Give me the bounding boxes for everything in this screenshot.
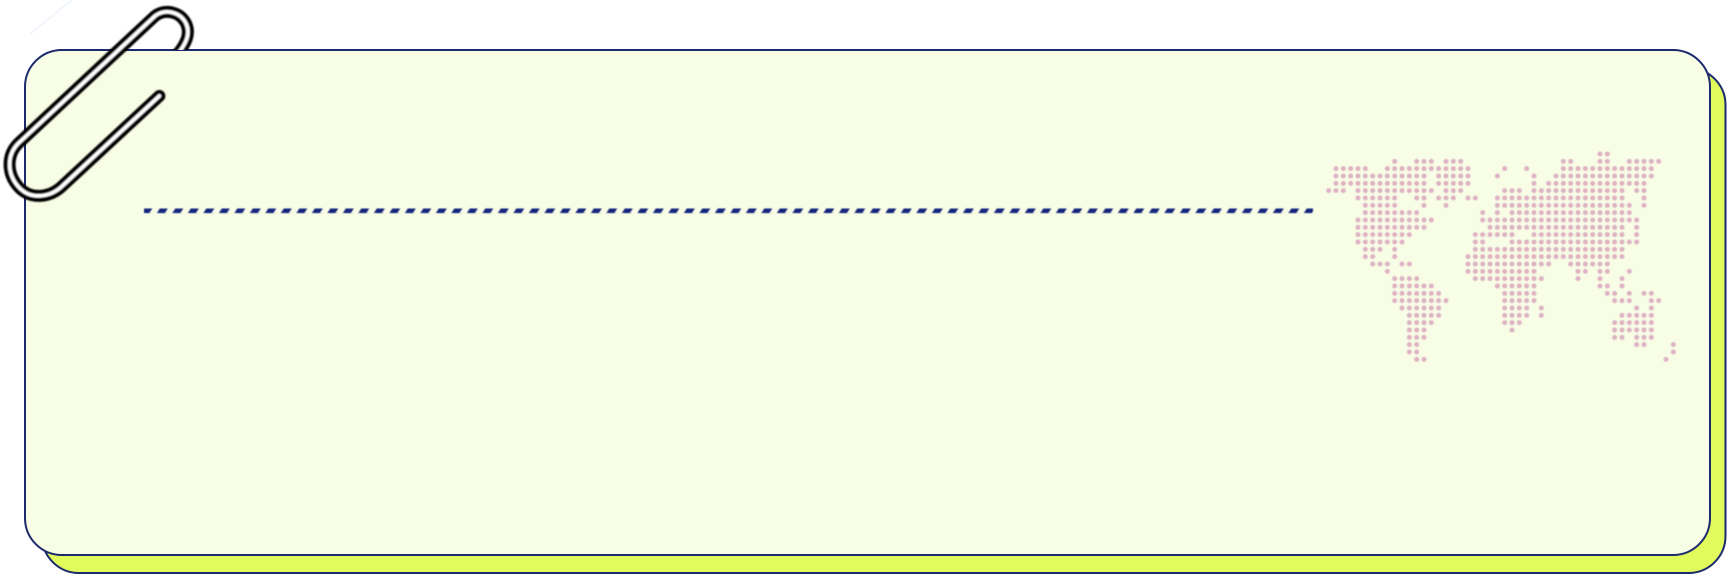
dotted world map bbox=[1329, 154, 1673, 359]
paperclip bbox=[10, 12, 188, 196]
dashed divider bbox=[144, 208, 1313, 213]
faint background streak bbox=[30, 0, 72, 34]
